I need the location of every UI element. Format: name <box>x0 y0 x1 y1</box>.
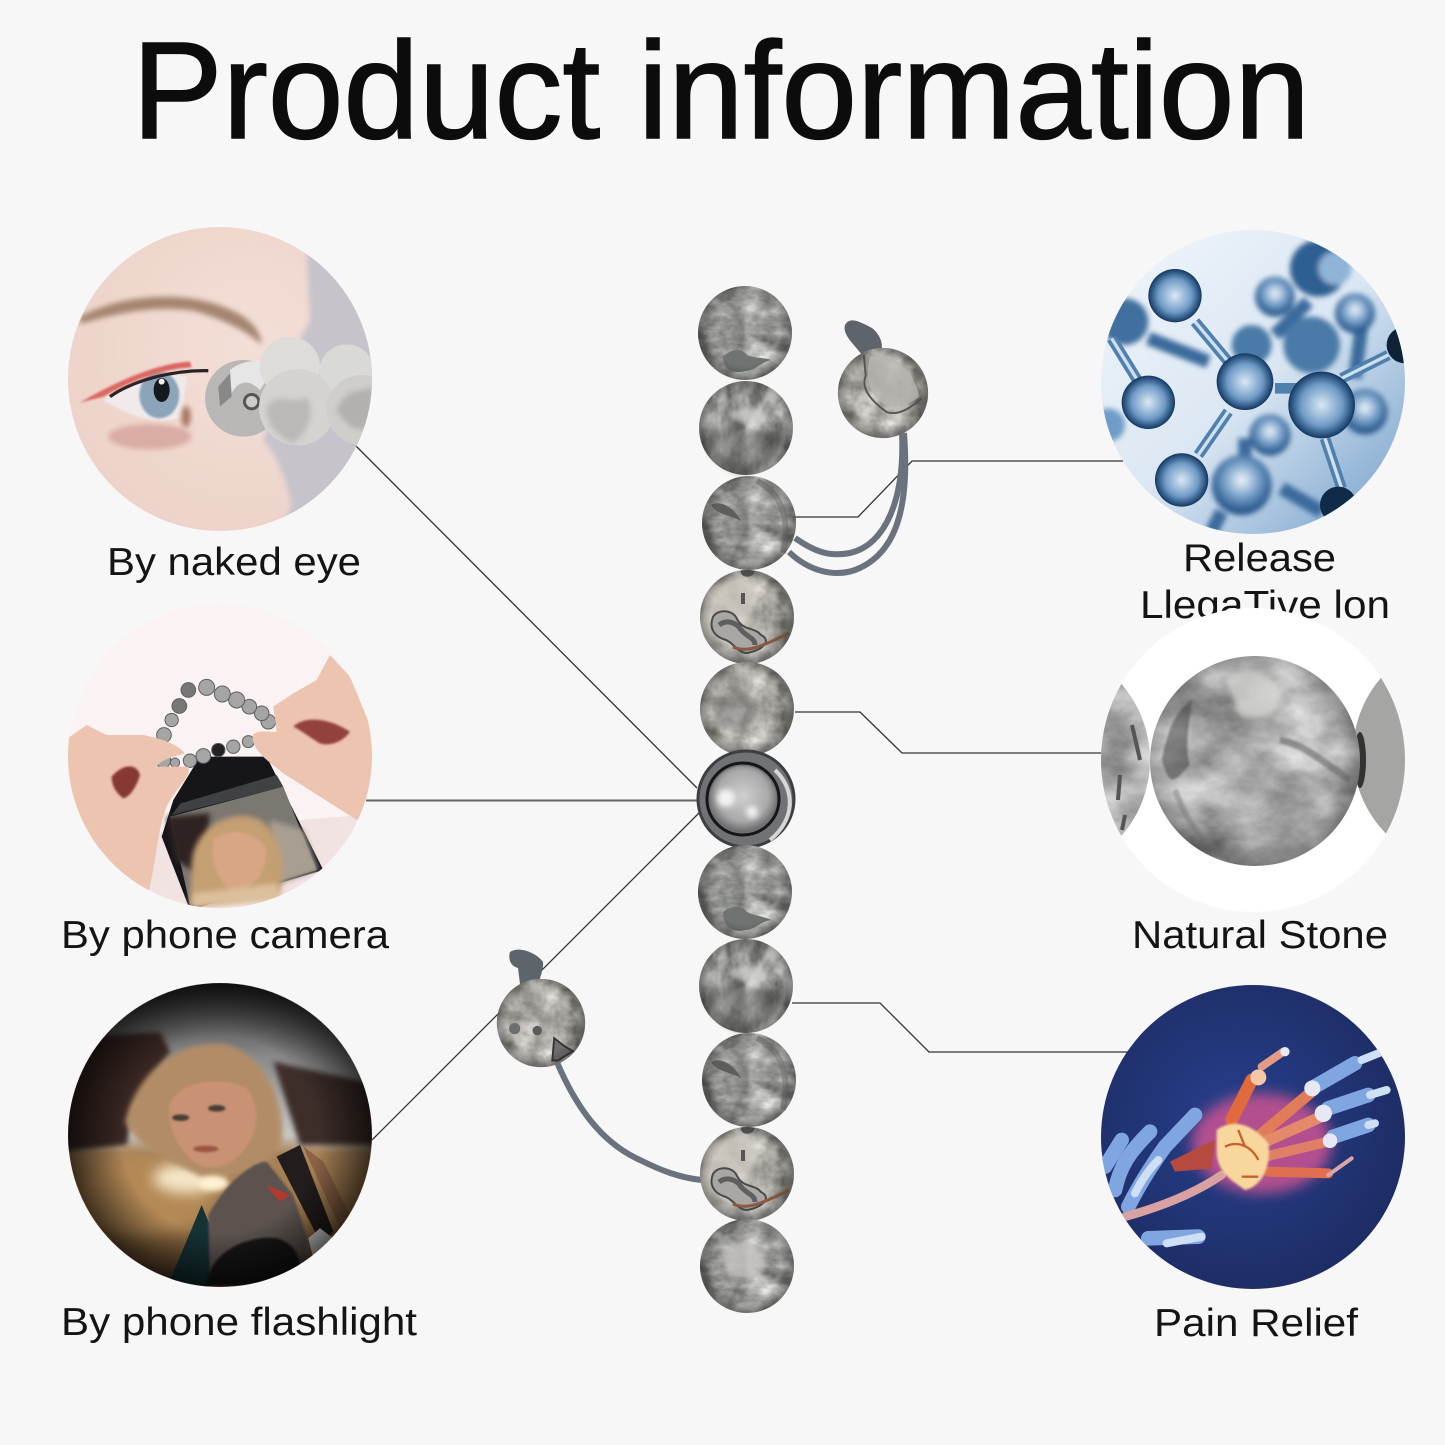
label: pain relief: Pain Relief <box>1154 1302 1358 1345</box>
left hand <box>60 725 189 893</box>
backlight glow <box>198 1176 228 1191</box>
bracelet <box>150 679 276 768</box>
label: release negative ion: Release <box>1183 537 1336 580</box>
label: natural stone: Natural Stone <box>1132 914 1388 957</box>
hills <box>60 1032 170 1152</box>
right hand <box>253 655 380 820</box>
icon: knot bottom <box>509 950 543 984</box>
eye <box>80 362 208 427</box>
icon: knot top <box>845 320 882 355</box>
bead 2 <box>699 381 793 475</box>
label: by phone camera: By phone camera <box>61 914 389 957</box>
side bead right <box>1355 678 1405 834</box>
bonds <box>1112 322 1388 488</box>
loose bead top <box>838 348 928 438</box>
bead 7 <box>699 939 793 1033</box>
glow <box>1192 1093 1332 1193</box>
main bead <box>1150 656 1360 866</box>
panel: by phone camera <box>68 655 372 908</box>
side bead left <box>1101 684 1150 836</box>
panel: natural stone <box>1101 608 1405 866</box>
panel: by phone flashlight <box>60 982 380 1288</box>
under eye shading <box>108 424 192 449</box>
carpal glow <box>1217 1124 1269 1190</box>
backdrop <box>1095 980 1415 1300</box>
vignette <box>68 983 372 1287</box>
label: by naked eye: By naked eye <box>107 541 361 584</box>
loose bead bottom <box>497 979 585 1067</box>
bead 8 <box>702 1033 796 1127</box>
label: by phone flashlight: By phone flashlight <box>61 1301 417 1344</box>
label: release negative ion <box>1140 537 1390 627</box>
bead 3 <box>702 476 796 570</box>
wrist bone <box>1170 1139 1215 1172</box>
bead 9 <box>700 1127 794 1221</box>
white disc <box>1101 608 1308 754</box>
bead 6 <box>698 845 792 939</box>
backdrop <box>60 600 380 920</box>
hair <box>125 1044 282 1178</box>
cords <box>556 433 905 1180</box>
bag strap <box>277 1145 333 1245</box>
bead 1 <box>698 286 792 380</box>
metal bead <box>205 360 266 437</box>
blurred molecules <box>1092 240 1388 532</box>
stone beads <box>259 336 372 446</box>
face <box>169 1082 256 1167</box>
grey backdrop <box>262 254 372 516</box>
jacket <box>208 1162 308 1285</box>
blue hand bones <box>1105 1053 1387 1243</box>
green top <box>170 1205 210 1287</box>
panel: release negative ion <box>1101 230 1405 534</box>
golden field <box>77 1155 210 1235</box>
foreground atoms <box>1148 269 1202 322</box>
eyes and mouth <box>172 1105 225 1152</box>
bead 4 <box>700 570 794 664</box>
metal projection bead <box>698 751 794 847</box>
sky and field <box>60 982 380 1288</box>
panel: by naked eye <box>68 227 372 531</box>
hot finger bones <box>1232 1052 1352 1175</box>
backdrop <box>1095 225 1415 545</box>
bead 5 <box>700 662 794 756</box>
leader lines <box>355 445 1128 1140</box>
red detail <box>267 1185 290 1202</box>
lower surface <box>149 816 358 908</box>
title: Product information <box>132 14 1310 168</box>
phone <box>162 757 323 910</box>
label: release negative ion: LlegaTive lon <box>1140 584 1390 627</box>
eyebrow <box>80 297 262 345</box>
bead 10 <box>700 1219 794 1313</box>
panel: pain relief <box>1095 980 1415 1300</box>
skin <box>68 227 370 531</box>
joints <box>1250 1047 1337 1148</box>
